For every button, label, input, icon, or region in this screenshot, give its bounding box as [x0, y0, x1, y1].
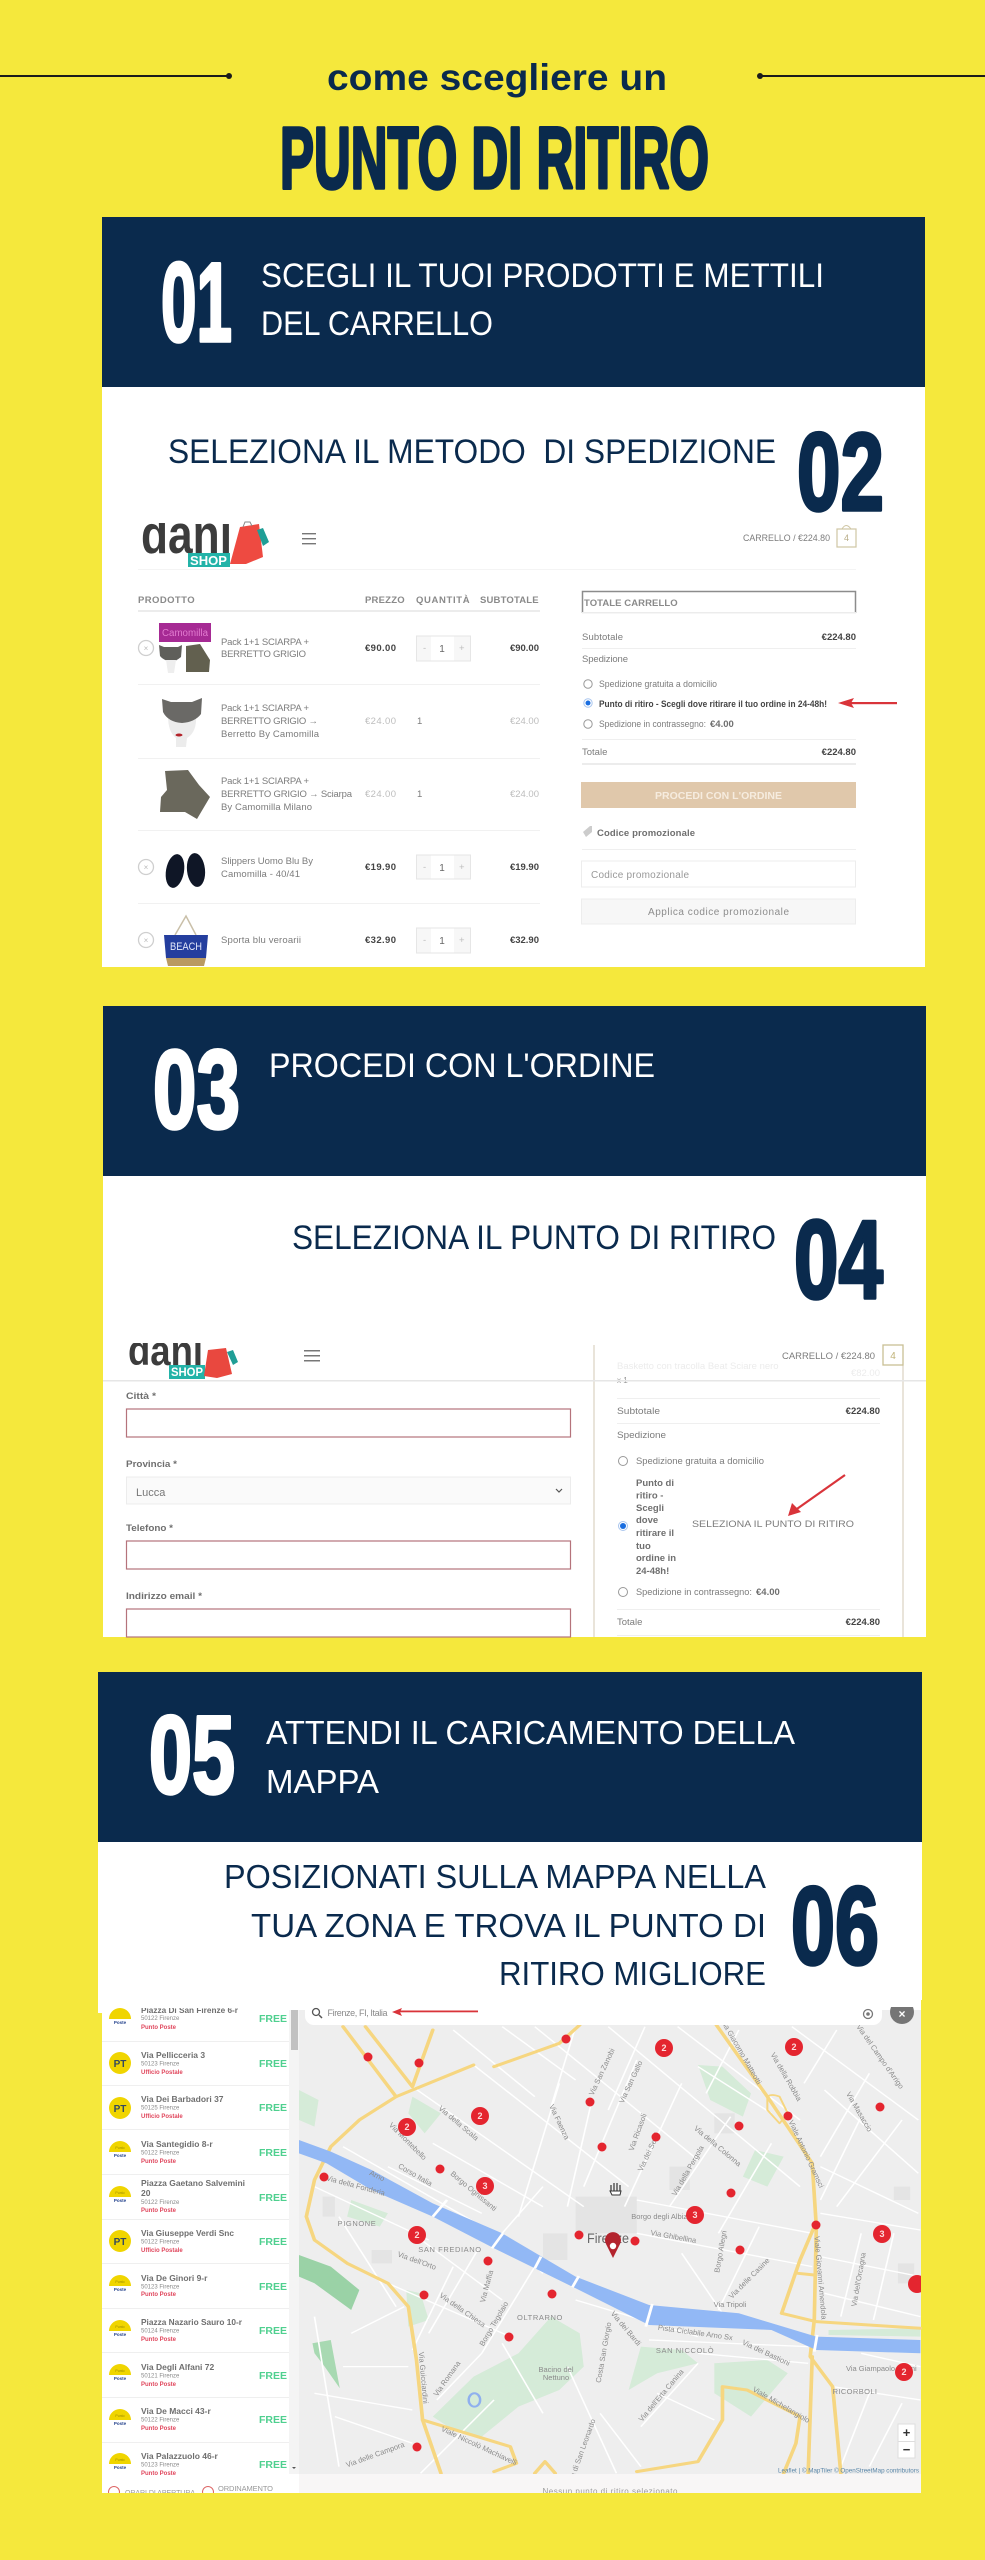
map street labels: RICORBOLI — [833, 2387, 877, 2396]
list row: Via De Ginori: Punto Poste — [141, 2292, 177, 2298]
screenshot: checkout order box: Spedizione — [617, 1430, 666, 1441]
panel: totale carrello: Subtotale — [582, 632, 623, 643]
sidebar footer: orari, ordinamento: ORARI DI APERTURA — [125, 2490, 195, 2497]
panel: step 01: 01 — [161, 240, 232, 365]
row: berretto — [162, 698, 539, 747]
list row: Via Degli Alfani: Punto Poste — [141, 2382, 177, 2388]
row: slippers: Slippers Uomo Blu By — [221, 856, 313, 867]
coupon: Codice promozionale — [597, 828, 695, 839]
panel: step 05: MAPPA — [266, 1763, 379, 1800]
list row: Via De Macci: Punto — [115, 2414, 125, 2418]
map pins: clusters: 2 — [414, 2230, 420, 2240]
map street labels: Nettuno — [543, 2373, 569, 2382]
row: pack sciarpa berretto: €90.00 — [365, 643, 396, 654]
map street labels: Corso Italia — [397, 2161, 435, 2189]
list row: Via Santegidio: FREE — [259, 2147, 287, 2159]
form: billing fields: Città * — [126, 1391, 156, 1402]
list row: Piazza Di San Firenze: Piazza Di San Firenze 6-r — [141, 2005, 239, 2015]
button: procedi con l'ordine: PROCEDI CON L'ORDINE — [655, 790, 782, 802]
panel: step 03: 03 — [153, 1028, 240, 1152]
list row: Via Degli Alfani: Via Degli Alfani 72 — [141, 2362, 214, 2372]
panel: step 06 — [98, 1842, 933, 2560]
screenshot: checkout order box: €82.00 — [851, 1368, 880, 1379]
icon: menu — [302, 533, 316, 544]
map street labels: Borgo Tegolaio — [477, 2300, 510, 2348]
list row: Via Giuseppe Verdi: Via Giuseppe Verdi Snc — [141, 2228, 234, 2238]
panel: totale carrello: Spedizione gratuita a domicilio — [599, 679, 717, 690]
list row: Via De Ginori: Punto — [115, 2280, 125, 2284]
list row: Piazza Di San Firenze: Poste — [114, 2020, 127, 2025]
list row: Piazza Gaetano Salvemini: Poste — [114, 2198, 127, 2203]
map street labels: Via dell'Orcagna — [849, 2251, 868, 2307]
list row: Via Giuseppe Verdi: Ufficio Postale — [141, 2248, 183, 2254]
list row: Via Dei Barbadori: 50125 Firenze — [141, 2106, 180, 2112]
list row: Piazza Nazario Sauro — [109, 2317, 287, 2343]
list row: Via De Macci: Punto Poste — [141, 2426, 177, 2432]
row: pack sciarpa berretto: Pack 1+1 SCIARPA + — [221, 637, 309, 648]
map street labels: Via del Campo d'Arrigo — [854, 2023, 906, 2091]
list row: Via Degli Alfani: Poste — [114, 2376, 127, 2381]
row: berretto: €24.00 — [510, 716, 539, 727]
row: sporta — [138, 916, 539, 966]
panel: step 04 — [103, 1176, 926, 1637]
search bar: × — [898, 2007, 906, 2021]
cart summary header: CARRELLO / €224.80 — [743, 533, 830, 544]
map pins: clusters: 2 — [477, 2111, 483, 2121]
list row: Via De Ginori: Via De Ginori 9-r — [141, 2273, 208, 2283]
panel: step 06: TUA ZONA E TROVA IL PUNTO DI — [251, 1907, 766, 1944]
row: sporta: €32.90 — [365, 935, 396, 946]
row: sporta: × — [144, 936, 149, 945]
list row: Via Giuseppe Verdi: FREE — [259, 2236, 287, 2248]
list row: Via Santegidio — [109, 2139, 287, 2165]
panel: totale carrello — [581, 592, 897, 924]
panel: step 02: SELEZIONA IL METODO DI SPEDIZIONE — [168, 433, 776, 471]
map — [102, 1995, 933, 2498]
logo: dani shop — [142, 522, 269, 567]
arrow: red pointing to punto di ritiro — [838, 698, 897, 708]
list row: Via Pellicceria — [109, 2050, 287, 2076]
row: sporta: €32.90 — [510, 935, 539, 946]
map pins: clusters: 3 — [692, 2210, 698, 2220]
map zoom control: + — [903, 2425, 911, 2440]
list row: Via Palazzuolo: Via Palazzuolo 46-r — [141, 2451, 219, 2461]
table header: QUANTITÀ — [416, 595, 470, 606]
list row: Via De Macci: Poste — [114, 2421, 127, 2426]
list row: Piazza Gaetano Salvemini: 20 — [141, 2188, 151, 2198]
list row: Piazza Gaetano Salvemini: 50122 Firenze — [141, 2200, 180, 2206]
list row: Via De Ginori: FREE — [259, 2281, 287, 2293]
list row: Via Giuseppe Verdi — [109, 2228, 287, 2254]
map street labels: Via Masaccio — [844, 2090, 874, 2133]
list row: Via Pellicceria: Via Pellicceria 3 — [141, 2050, 205, 2060]
row: slippers — [138, 852, 539, 889]
list row: Piazza Di San Firenze: 50122 Firenze — [141, 2016, 180, 2022]
map street labels: Via Romana — [431, 2358, 463, 2398]
panel: step 06: 06 — [791, 1865, 879, 1988]
list row: Via Degli Alfani: Punto — [115, 2369, 125, 2373]
panel: totale carrello: Spedizione — [582, 654, 628, 665]
map street labels: Borgo degli Albizi — [631, 2212, 689, 2221]
map pins: clusters: 2 — [404, 2122, 410, 2132]
screenshot: checkout order box: dove — [636, 1515, 658, 1526]
list row: Via De Macci — [109, 2406, 287, 2432]
map street labels: Viale Antonio Gramsci — [787, 2119, 826, 2190]
row: sporta: + — [459, 935, 465, 946]
row: sciarpa: €24.00 — [510, 789, 539, 800]
map street labels: Via Montebello — [387, 2121, 428, 2162]
row: slippers: €19.90 — [365, 862, 396, 873]
map street labels: Via dell'Orto — [396, 2249, 437, 2272]
coupon: Codice promozionale — [591, 870, 689, 881]
map street labels: Via della Chiesa — [438, 2291, 488, 2330]
map attribution: Leaflet | © MapTiler © OpenStreetMap contributors — [778, 2466, 920, 2474]
list row: Via Pellicceria: FREE — [259, 2058, 287, 2070]
arrow: red pointing to search — [392, 2008, 478, 2016]
list row: Via De Ginori — [109, 2273, 287, 2298]
row: pack sciarpa berretto: €90.00 — [510, 643, 539, 654]
screenshot: checkout order box: Basketto con tracolla Beat Sciare nero — [617, 1361, 779, 1372]
list row: Via Palazzuolo: 50123 Firenze — [141, 2462, 180, 2468]
logo: dani shop: dani — [141, 503, 232, 565]
list row: Piazza Di San Firenze — [109, 2005, 287, 2031]
cart summary header: 4 — [844, 533, 849, 543]
map street labels: OLTRARNO — [517, 2313, 563, 2322]
button: procedi con l'ordine — [581, 782, 856, 808]
map street labels: Via Ricasoli — [627, 2112, 649, 2152]
row: sciarpa: 1 — [417, 789, 422, 800]
list row: Via Dei Barbadori: PT — [114, 2104, 126, 2115]
list row: Piazza Nazario Sauro: 50124 Firenze — [141, 2328, 180, 2334]
map pins: single points — [320, 2034, 884, 2452]
list row: Piazza Gaetano Salvemini — [109, 2178, 287, 2214]
row: berretto: 1 — [417, 716, 422, 727]
title — [0, 57, 985, 207]
screenshot: checkout order box: €224.80 — [846, 1617, 880, 1628]
sidebar: pickup point list — [102, 2000, 299, 2498]
panel: step 01: SCEGLI IL TUOI PRODOTTI E METTILI — [261, 257, 824, 295]
list row: Via Santegidio: Punto Poste — [141, 2159, 177, 2165]
screenshot: checkout order box: tuo — [636, 1541, 651, 1552]
map street labels: Via dei Bardi — [609, 2309, 643, 2348]
table header: SUBTOTALE — [480, 595, 539, 606]
screenshot: checkout order box — [103, 1345, 926, 1637]
list row: Via Pellicceria: 50123 Firenze — [141, 2062, 180, 2068]
screenshot: checkout order box: Spedizione in contrassegno: — [636, 1587, 752, 1598]
panel: step 01 — [102, 217, 925, 387]
map street labels: Via Tripoli — [714, 2300, 747, 2309]
table header — [138, 595, 540, 612]
row: berretto: Pack 1+1 SCIARPA + — [221, 703, 309, 714]
list row: Piazza Nazario Sauro: Poste — [114, 2332, 127, 2337]
screenshot: checkout order box: Punto di — [636, 1478, 674, 1489]
list row: Via Dei Barbadori: FREE — [259, 2102, 287, 2114]
list row: Piazza Nazario Sauro: Punto — [115, 2325, 125, 2329]
list row: Via Degli Alfani: FREE — [259, 2370, 287, 2382]
map street labels: Via della Scala — [437, 2104, 481, 2143]
list row: Via Santegidio: Poste — [114, 2153, 127, 2158]
row: berretto: BERRETTO GRIGIO → — [221, 716, 318, 727]
map street labels: Via Guicciardini — [417, 2351, 430, 2404]
row: slippers: 1 — [439, 863, 445, 874]
list row: Via Giuseppe Verdi: 50122 Firenze — [141, 2240, 180, 2246]
map footer strip — [299, 2474, 921, 2496]
map street labels: Via della Robbia — [769, 2051, 804, 2103]
list row: Via Palazzuolo — [109, 2451, 287, 2477]
row: sciarpa — [160, 770, 539, 819]
map street labels: Via delle Casine — [727, 2256, 772, 2301]
row: berretto: Berretto By Camomilla — [221, 729, 320, 740]
screenshot: checkout order box: x 1 — [617, 1376, 628, 1385]
screenshot: checkout order box: Spedizione gratuita a domicilio — [636, 1456, 764, 1467]
map street labels: Firenze — [587, 2230, 629, 2246]
logo: dani shop small: SHOP — [171, 1365, 203, 1379]
logo: dani shop: SHOP — [190, 553, 227, 568]
list row: Via Pellicceria: PT — [114, 2059, 126, 2070]
panel: totale carrello: €4.00 — [710, 719, 734, 730]
panel: totale carrello: Punto di ritiro - Scegli dove ritirare il tuo ordine in 24-48h! — [599, 699, 827, 710]
map street labels: Borgo Allegri — [712, 2230, 729, 2273]
row: slippers: × — [144, 863, 149, 872]
list row: Piazza Di San Firenze: FREE — [259, 2013, 287, 2025]
row: slippers: Camomilla - 40/41 — [221, 869, 300, 880]
sidebar footer: orari, ordinamento — [102, 2478, 299, 2498]
panel: step 01: DEL CARRELLO — [261, 305, 493, 343]
form: billing fields: Provincia * — [126, 1459, 177, 1470]
icon: hand cursor — [610, 2183, 621, 2195]
row: pack sciarpa berretto: - — [423, 643, 426, 654]
panel: totale carrello: Spedizione in contrassegno: — [599, 719, 706, 730]
row: slippers: + — [459, 862, 465, 873]
row: berretto: €24.00 — [365, 716, 396, 727]
map street labels: Via dei Servi — [636, 2131, 662, 2173]
screenshot: checkout order box: 24-48h! — [636, 1566, 669, 1577]
screenshot: checkout order box: ordine in — [636, 1553, 676, 1564]
map street labels: Via di San Leonardo — [566, 2418, 597, 2485]
logo: dani shop small: dani — [128, 1327, 203, 1374]
map street labels: Via della Pergola — [670, 2143, 706, 2197]
list row: Piazza Gaetano Salvemini: Punto Poste — [141, 2208, 177, 2214]
list row: Via Santegidio: Punto — [115, 2146, 125, 2150]
coupon: Applica codice promozionale — [648, 907, 789, 918]
row: slippers: €19.90 — [510, 862, 539, 873]
map street labels: Via San Gallo — [617, 2059, 644, 2105]
map street labels: PIGNONE — [338, 2219, 376, 2228]
list row: Piazza Nazario Sauro: FREE — [259, 2325, 287, 2337]
panel: step 05 — [98, 1672, 922, 1842]
cart summary header: CARRELLO / €224.80 — [782, 1351, 875, 1362]
list row: Via Dei Barbadori: Via Dei Barbadori 37 — [141, 2094, 224, 2104]
form: billing fields: Telefono * — [126, 1523, 173, 1534]
screenshot: checkout order box: Totale — [617, 1617, 642, 1628]
row: pack sciarpa berretto: × — [144, 644, 149, 653]
panel: step 03: PROCEDI CON L'ORDINE — [269, 1047, 655, 1085]
map street labels: SAN FREDIANO — [418, 2245, 482, 2254]
map zoom control: − — [903, 2442, 911, 2457]
panel: totale carrello: Totale — [582, 747, 607, 758]
list row: Via Dei Barbadori: Ufficio Postale — [141, 2114, 183, 2120]
screenshot: checkout order box: €4.00 — [756, 1587, 780, 1598]
cart summary header — [782, 1345, 903, 1365]
list row: Piazza Nazario Sauro: Piazza Nazario Sauro 10-r — [141, 2317, 243, 2327]
screenshot: checkout order box: Scegli — [636, 1503, 664, 1514]
list row: Via Santegidio: 50122 Firenze — [141, 2150, 180, 2156]
map street labels: Via Giacomo Matteotti — [719, 2018, 764, 2086]
map street labels — [325, 2018, 917, 2485]
map street labels: Bacino del — [538, 2365, 574, 2374]
map street labels: Viale Niccolò Machiavelli — [440, 2424, 519, 2467]
panel: step 06: RITIRO MIGLIORE — [499, 1955, 766, 1992]
list row: Via De Ginori: Poste — [114, 2287, 127, 2292]
list row: Piazza Gaetano Salvemini: FREE — [259, 2192, 287, 2204]
row: sciarpa: €24.00 — [365, 789, 396, 800]
row: sporta: BEACH — [170, 941, 202, 953]
row: sciarpa: By Camomilla Milano — [221, 802, 312, 813]
map street labels: Arno — [368, 2168, 386, 2183]
map pins: clusters: 2 — [901, 2367, 907, 2377]
panel: step 03 — [103, 1006, 926, 1176]
row: sporta: - — [423, 935, 426, 946]
screenshot: checkout order box: ritiro - — [636, 1490, 663, 1502]
screenshot: checkout order box: Subtotale — [617, 1406, 660, 1417]
list row: Piazza Gaetano Salvemini: Piazza Gaetano Salvemini — [141, 2178, 245, 2188]
list row: Piazza Di San Firenze: Punto Poste — [141, 2025, 177, 2031]
row: sporta: 1 — [439, 936, 445, 947]
search bar — [305, 1995, 916, 2025]
map street labels: Via Faenza — [547, 2103, 572, 2142]
row: slippers: - — [423, 862, 426, 873]
map street labels: Pista Ciclabile Arno Sx — [657, 2323, 734, 2342]
list row: Via Palazzuolo: Punto — [115, 2458, 125, 2462]
list row: Via Dei Barbadori — [109, 2094, 287, 2120]
coupon — [582, 826, 856, 924]
sidebar footer: orari, ordinamento: ORDINAMENTO — [218, 2484, 273, 2493]
cart summary header — [743, 526, 856, 547]
table header: PREZZO — [365, 595, 405, 606]
map street labels: Via dell'Erta Canina — [637, 2367, 686, 2423]
panel: totale carrello: €224.80 — [822, 632, 856, 643]
panel: step 06: POSIZIONATI SULLA MAPPA NELLA — [224, 1858, 766, 1895]
panel: step 05: 05 — [149, 1694, 235, 1817]
map street labels: Via dei Bastioni — [741, 2338, 792, 2368]
map street labels: Via della Colonna — [692, 2124, 744, 2169]
screenshot: checkout order box: ritirare il — [636, 1528, 674, 1539]
panel: step 02: 02 — [797, 411, 884, 534]
panel: step 02 — [102, 387, 925, 967]
table header: PRODOTTO — [138, 595, 195, 606]
row: pack sciarpa berretto: Camomilla — [162, 628, 208, 639]
list row: Via Palazzuolo: Punto Poste — [141, 2471, 177, 2477]
list row: Via Palazzuolo: FREE — [259, 2459, 287, 2471]
list row: Via De Macci: 50122 Firenze — [141, 2418, 180, 2424]
map footer strip: Nessun punto di ritiro selezionato — [542, 2487, 678, 2496]
map pins: clusters: 3 — [482, 2181, 488, 2191]
logo: dani shop small — [130, 1343, 238, 1379]
form: billing fields: Lucca — [136, 1487, 166, 1499]
list row: Via Palazzuolo: Poste — [114, 2465, 127, 2470]
row: pack sciarpa berretto: + — [459, 643, 465, 654]
list row: Via De Ginori: 50123 Firenze — [141, 2284, 180, 2290]
form: billing fields — [126, 1391, 570, 1637]
panel: step 04: SELEZIONA IL PUNTO DI RITIRO — [292, 1219, 776, 1257]
map street labels: Via Giampaolo Orsini — [846, 2364, 917, 2373]
panel: step 04: 04 — [794, 1198, 883, 1322]
map pins: clusters: 2 — [661, 2043, 667, 2053]
screenshot: checkout order box: €224.80 — [846, 1406, 880, 1417]
map street labels: Via San Zanobi — [587, 2047, 617, 2097]
list row: Via Santegidio: Via Santegidio 8-r — [141, 2139, 213, 2149]
sidebar top clip — [102, 2000, 290, 2008]
list row: Via De Macci: Via De Macci 43-r — [141, 2406, 211, 2416]
row: pack sciarpa berretto: BERRETTO GRIGIO — [221, 649, 306, 660]
map pins: clusters: 2 — [791, 2042, 797, 2052]
row: pack sciarpa berretto — [138, 623, 539, 673]
search bar: Firenze, FI, Italia — [328, 2008, 388, 2018]
map street labels: Via della Fonderia — [325, 2173, 387, 2198]
row: sciarpa: Pack 1+1 SCIARPA + — [221, 776, 309, 787]
list row: Via Pellicceria: Ufficio Postale — [141, 2070, 183, 2076]
map street labels: Borgo Ognissanti — [449, 2169, 499, 2213]
map pins: clusters: 3 — [879, 2229, 885, 2239]
map zoom control — [898, 2424, 915, 2458]
map street labels: Viale Michelangiolo — [751, 2385, 811, 2425]
icon: menu — [304, 1350, 320, 1362]
title: come scegliere un — [327, 57, 667, 98]
list row: Via Degli Alfani — [109, 2362, 287, 2388]
map street labels: Costa San Giorgio — [594, 2322, 613, 2384]
list row: Piazza Gaetano Salvemini: Punto — [115, 2191, 125, 2195]
arrow: red diagonal — [788, 1475, 845, 1516]
screenshot: checkout order box: SELEZIONA IL PUNTO DI RITIRO — [692, 1519, 854, 1530]
map street labels: Viale Giovanni Amendola — [812, 2236, 829, 2321]
row: sporta: Sporta blu veroarii — [221, 935, 301, 946]
map street labels: Via delle Campora — [345, 2440, 406, 2469]
list row: Via Degli Alfani: 50121 Firenze — [141, 2374, 180, 2380]
panel: totale carrello: TOTALE CARRELLO — [584, 598, 678, 609]
map street labels: Via Maffia — [478, 2268, 495, 2303]
map street labels: Via Ghibellina — [650, 2228, 698, 2245]
row: pack sciarpa berretto: 1 — [439, 644, 445, 655]
icon: location pin — [605, 2232, 621, 2258]
map street labels: SAN NICCOLÒ — [656, 2346, 714, 2355]
list row: Via De Macci: FREE — [259, 2414, 287, 2426]
list row: Piazza Nazario Sauro: Punto Poste — [141, 2337, 177, 2343]
row: sciarpa: BERRETTO GRIGIO → Sciarpa — [221, 789, 353, 800]
panel: totale carrello: €224.80 — [822, 747, 856, 758]
map pins: clusters — [398, 2038, 926, 2381]
list row: Via Giuseppe Verdi: PT — [114, 2237, 126, 2248]
cart summary header: 4 — [890, 1351, 896, 1362]
panel: step 05: ATTENDI IL CARICAMENTO DELLA — [266, 1714, 795, 1751]
form: billing fields: Indirizzo email * — [126, 1591, 202, 1602]
